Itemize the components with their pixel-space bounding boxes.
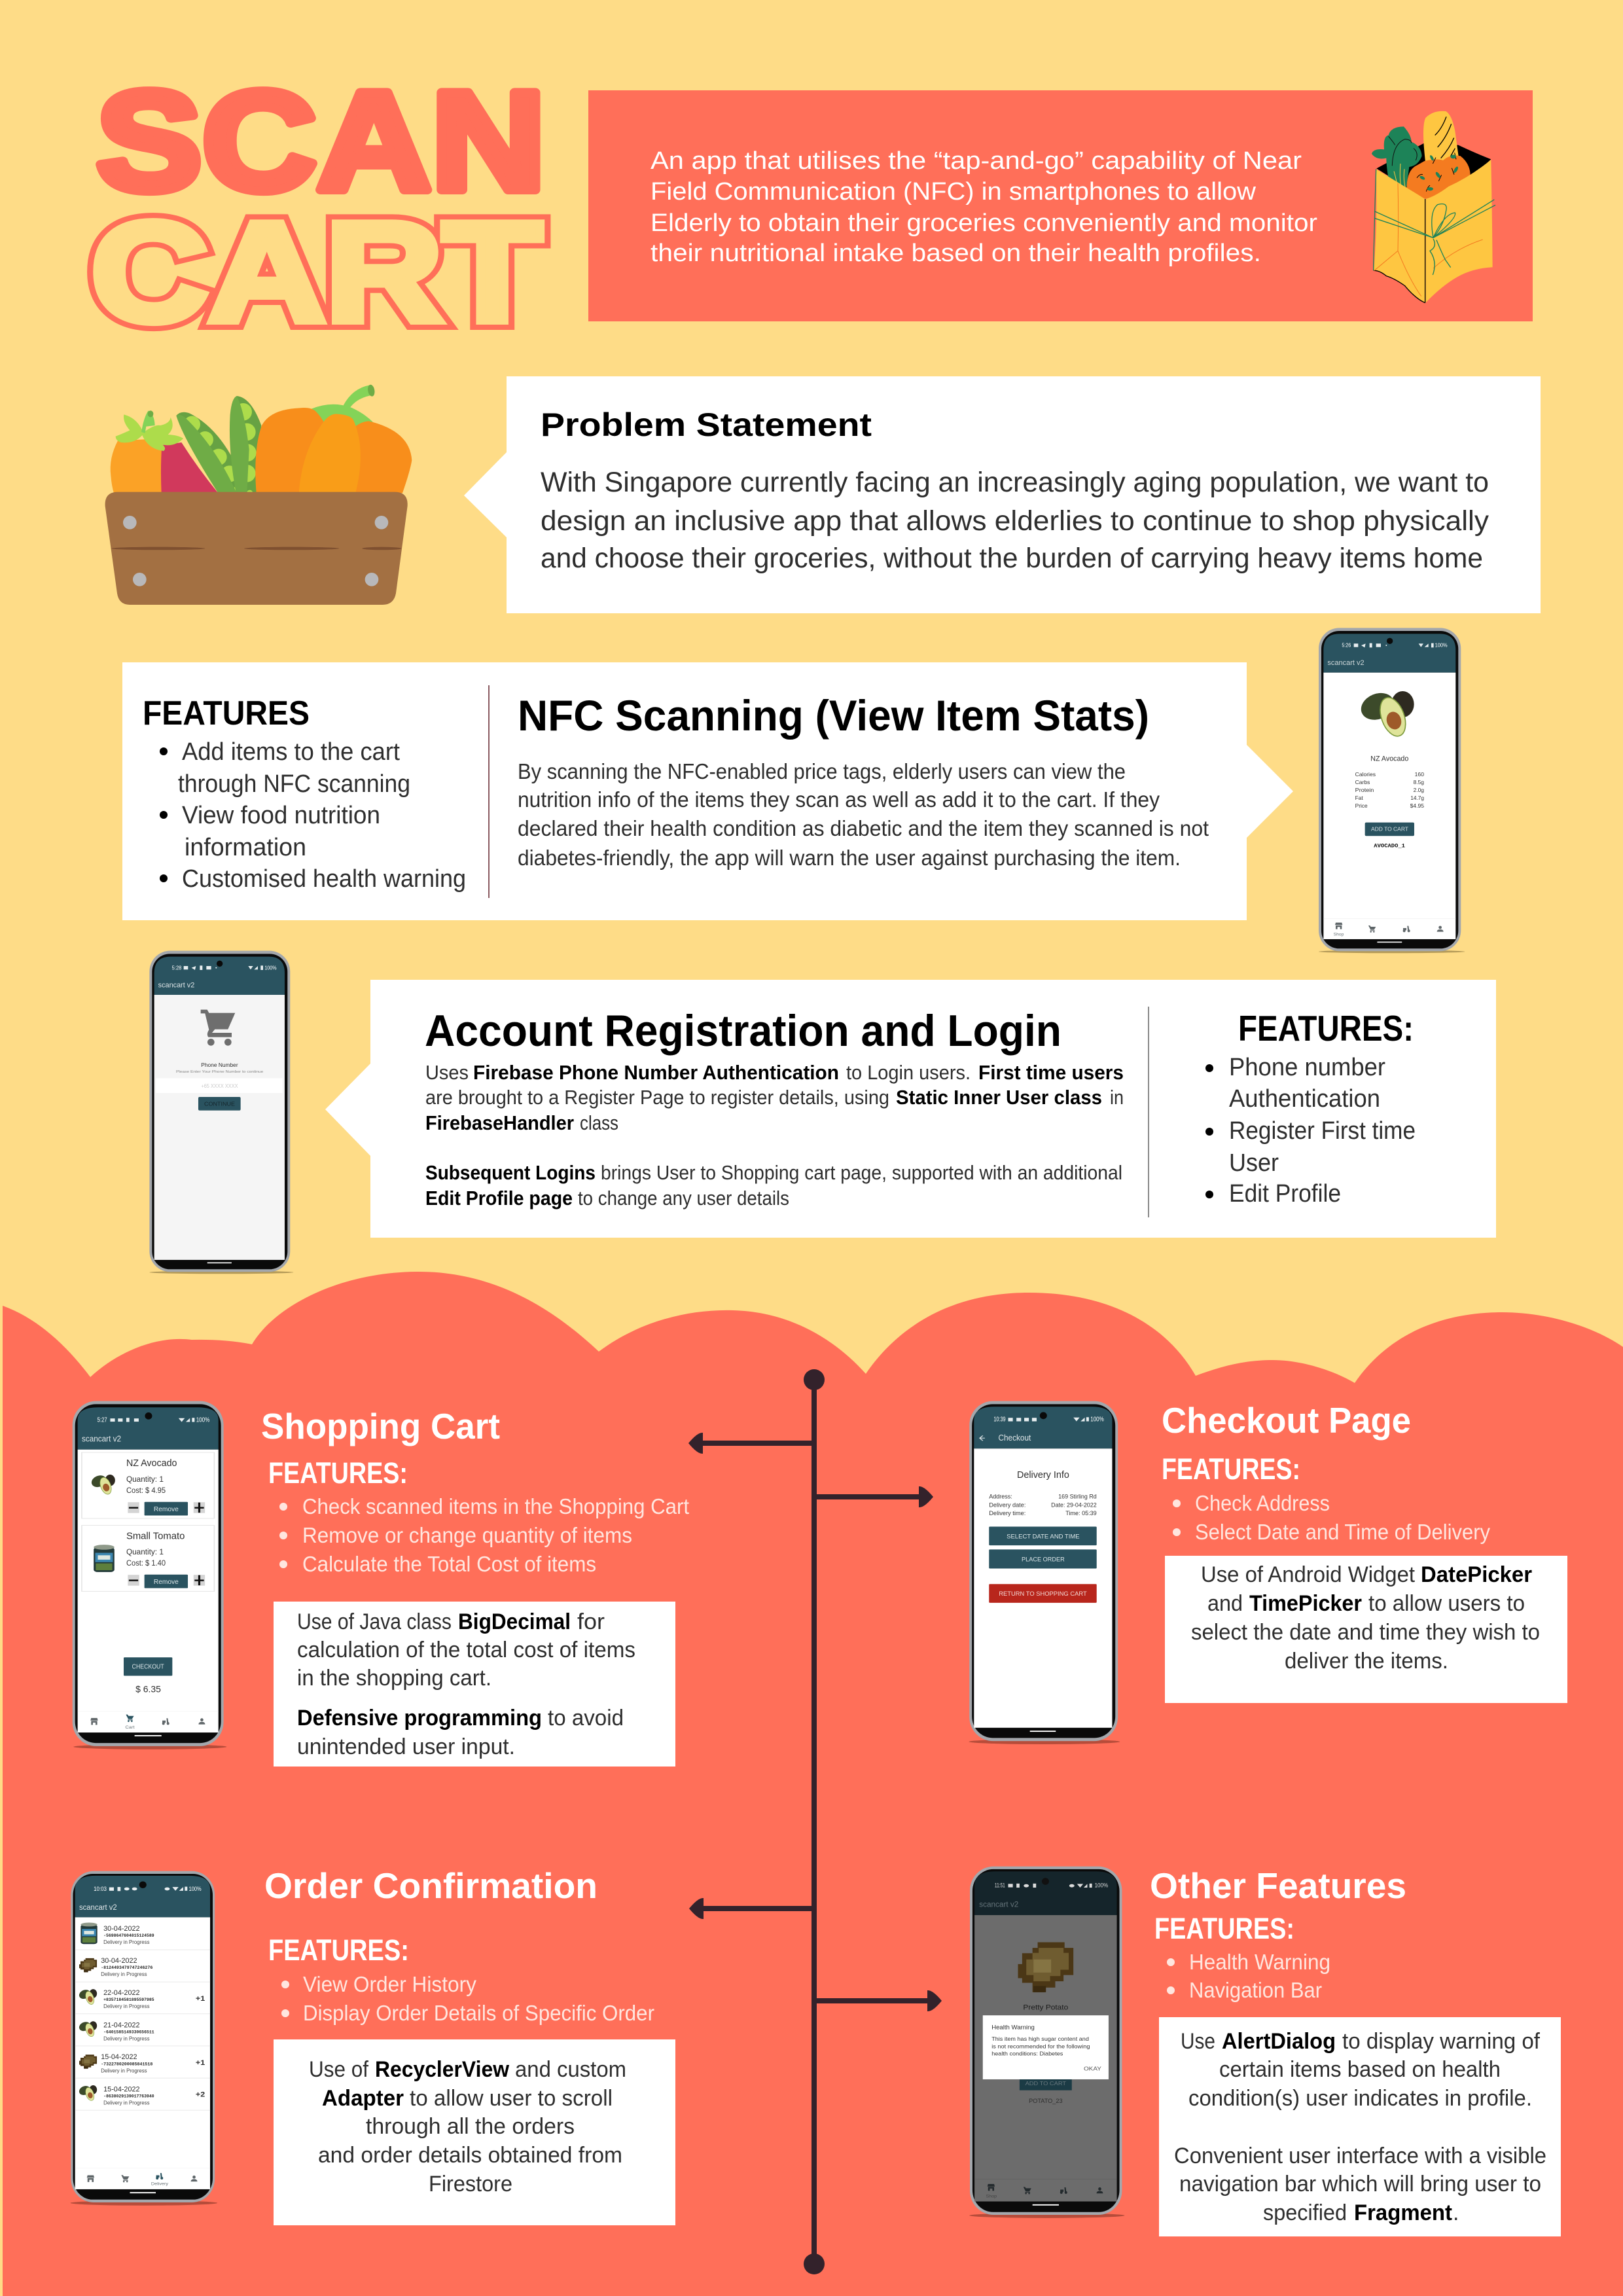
callout: BigDecimal xyxy=(274,1602,675,1767)
order row 4: -6401585149330656511 xyxy=(103,2030,154,2035)
title: Scan Cart xyxy=(91,62,546,351)
text: problem statement body: and choose their groceries, without the burden of carrying heavy items home xyxy=(541,543,1483,574)
callout: AlertDialog and navigation: specified xyxy=(1263,2200,1347,2225)
heading: other features: Other Features xyxy=(1150,1865,1406,1906)
phone mockup: login screen: 100% xyxy=(264,965,277,971)
callout: BigDecimal: unintended user input. xyxy=(297,1734,515,1759)
dialog: health warning xyxy=(983,2015,1109,2079)
phone mockup: item stats screen: Fat xyxy=(1355,795,1363,801)
text: problem statement body xyxy=(541,467,1489,574)
callout: RecyclerView: to allow user to scroll xyxy=(410,2086,613,2111)
cart item: small tomato: Quantity: 1 xyxy=(126,1549,164,1556)
list: account features: Register First time xyxy=(1229,1117,1416,1145)
arrow: to shopping cart xyxy=(688,1433,812,1454)
order row 5: Delivery in Progress xyxy=(101,2068,147,2074)
phone mockup: checkout screen: Checkout xyxy=(998,1433,1031,1443)
text: account description: Edit Profile page xyxy=(425,1187,573,1210)
order row 3: +1 xyxy=(196,1994,205,2003)
callout: AlertDialog and navigation: . xyxy=(1453,2200,1459,2225)
callout: DatePicker and TimePicker: and xyxy=(1207,1591,1243,1616)
heading: account registration: Account Registration and Login xyxy=(425,1006,1061,1056)
order row 3 xyxy=(75,1988,210,2014)
phone mockup: item stats screen: NZ Avocado xyxy=(1370,755,1408,763)
phone mockup: checkout screen: 169 Stirling Rd xyxy=(1058,1493,1097,1500)
phone mockup: item stats screen: Shop xyxy=(1334,932,1344,937)
phone mockup: order history screen: 100% xyxy=(189,1885,202,1892)
phone mockup: shopping cart screen: $ 6.35 xyxy=(135,1684,161,1694)
callout: RecyclerView: and custom xyxy=(515,2057,626,2082)
phone mockup: health warning screen: Shop xyxy=(986,2193,997,2198)
phone mockup: shopping cart screen: CHECKOUT xyxy=(132,1663,164,1670)
title: Scan Cart: CART xyxy=(91,192,542,351)
order row 3: +8357184581895597985 xyxy=(103,1997,154,2002)
text: NFC description xyxy=(518,759,1209,870)
panel: problem statement xyxy=(464,376,1541,613)
dialog: health warning: Health Warning xyxy=(991,2024,1035,2031)
cart item: avocado: Remove xyxy=(154,1505,179,1513)
phone mockup: item stats screen: Price xyxy=(1355,802,1368,809)
phone mockup: login screen: 5:28 xyxy=(172,965,182,971)
order row 6: -8638029139017763940 xyxy=(103,2094,154,2099)
callout: BigDecimal: to avoid xyxy=(548,1706,624,1731)
phone mockup: item stats screen xyxy=(1319,628,1465,953)
callout: RecyclerView: and order details obtained from xyxy=(318,2143,622,2168)
panel: account registration xyxy=(325,980,1496,1238)
text: NFC description: nutrition info of the items they scan as well as add it to the cart. If they xyxy=(518,787,1160,812)
order row 1: 30-04-2022 xyxy=(103,1924,140,1933)
list: order features: Display Order Details of Specific Order xyxy=(303,2001,654,2025)
list: order features: View Order History xyxy=(303,1972,476,1996)
title: Scan Cart: CART xyxy=(91,192,542,351)
title: Scan Cart: SCAN xyxy=(96,62,546,220)
arrow: to order confirmation xyxy=(689,1898,812,1919)
callout: AlertDialog and navigation: AlertDialog xyxy=(1222,2029,1336,2054)
phone mockup: checkout screen: Time: 05:39 xyxy=(1065,1510,1097,1516)
phone mockup: health warning screen: 100% xyxy=(1095,1882,1108,1889)
phone mockup: item stats screen: ADD TO CART xyxy=(1371,827,1408,833)
subheading: order features: FEATURES: xyxy=(268,1933,409,1967)
text: app description: Elderly to obtain their groceries conveniently and monitor xyxy=(651,209,1317,237)
phone mockup: order history screen: scancart v2 xyxy=(79,1903,117,1912)
callout: RecyclerView: Use of xyxy=(309,2057,369,2082)
list: other features: Navigation Bar xyxy=(1189,1978,1322,2002)
phone mockup: checkout screen: Delivery Info xyxy=(1017,1469,1069,1480)
text: account description: FirebaseHandler xyxy=(425,1111,574,1134)
list: account features: Authentication xyxy=(1229,1085,1380,1113)
phone mockup: item stats screen: 100% xyxy=(1435,643,1448,649)
list: account features: Edit Profile xyxy=(1229,1180,1341,1208)
order row 6: Delivery in Progress xyxy=(103,2100,150,2106)
callout: DatePicker and TimePicker: deliver the items. xyxy=(1285,1649,1448,1674)
order row 6: +2 xyxy=(196,2090,205,2099)
order row 2: 30-04-2022 xyxy=(101,1957,137,1965)
text: problem statement body: With Singapore currently facing an increasingly aging population, we want to xyxy=(541,467,1489,498)
list: NFC features: View food nutrition xyxy=(182,802,380,829)
order row 5: -7322780200085841518 xyxy=(101,2062,152,2067)
phone mockup: health warning screen: Pretty Potato xyxy=(1023,2003,1068,2012)
text: account description: to change any user details xyxy=(578,1187,789,1210)
text: account description: Firebase Phone Number Authentication xyxy=(473,1061,839,1084)
order row 4 xyxy=(75,2020,210,2046)
phone mockup: checkout screen: RETURN TO SHOPPING CART xyxy=(999,1590,1087,1597)
callout: BigDecimal: BigDecimal xyxy=(458,1609,571,1634)
list: NFC features: through NFC scanning xyxy=(178,770,410,798)
phone mockup: health warning screen: scancart v2 xyxy=(979,1900,1018,1909)
phone mockup: item stats screen: 2.0g xyxy=(1414,787,1424,793)
callout: RecyclerView: Firestore xyxy=(429,2172,512,2197)
section: other features xyxy=(1150,1865,1561,2236)
callout: AlertDialog and navigation: certain items based on health xyxy=(1219,2057,1501,2082)
order row 6: 15-04-2022 xyxy=(103,2085,140,2094)
cart item: avocado: Cost: $ 4.95 xyxy=(126,1487,166,1495)
list: checkout features: Select Date and Time of Delivery xyxy=(1195,1520,1490,1544)
callout: DatePicker and TimePicker: to allow users to xyxy=(1368,1591,1525,1616)
list: shopping cart features: Remove or change quantity of items xyxy=(302,1523,632,1547)
list: NFC features: Customised health warning xyxy=(182,865,466,893)
heading: features: FEATURES xyxy=(143,694,310,732)
phone mockup: checkout screen: 100% xyxy=(1090,1416,1104,1423)
text: account description: to Login users. xyxy=(846,1061,971,1084)
phone mockup: shopping cart screen xyxy=(73,1401,226,1749)
list: NFC features xyxy=(160,738,466,893)
text: app description: An app that utilises the “tap-and-go” capability of Near xyxy=(651,147,1302,175)
list: NFC features: Add items to the cart xyxy=(182,738,400,766)
subheading: checkout features: FEATURES: xyxy=(1162,1452,1300,1486)
callout: DatePicker and TimePicker xyxy=(1165,1556,1567,1703)
panel: app description xyxy=(588,90,1533,321)
text: account description: First time users xyxy=(978,1061,1124,1084)
phone mockup: item stats screen: 5:26 xyxy=(1342,643,1351,649)
callout: AlertDialog and navigation: Convenient user interface with a visible xyxy=(1174,2144,1546,2168)
text: app description xyxy=(651,147,1317,267)
list: account features: User xyxy=(1229,1149,1279,1177)
phone mockup: health warning screen: 11:51 xyxy=(995,1882,1005,1889)
callout: AlertDialog and navigation xyxy=(1159,2017,1561,2236)
order row 3: Delivery in Progress xyxy=(103,2004,150,2009)
heading: account features: FEATURES: xyxy=(1238,1008,1414,1049)
list: other features xyxy=(1167,1950,1330,2002)
order row 1: Delivery in Progress xyxy=(103,1939,150,1945)
heading: shopping cart: Shopping Cart xyxy=(261,1406,500,1446)
phone mockup: shopping cart screen: 5:27 xyxy=(98,1416,107,1424)
section: order confirmation xyxy=(264,1865,675,2225)
phone mockup: item stats screen: Carbs xyxy=(1355,779,1370,785)
callout: AlertDialog and navigation: to display warning of xyxy=(1342,2029,1541,2054)
phone mockup: checkout screen: 10:39 xyxy=(993,1416,1006,1423)
phone mockup: health warning screen xyxy=(969,1867,1124,2218)
phone mockup: item stats screen: $4.95 xyxy=(1410,802,1424,809)
heading: checkout page: Checkout Page xyxy=(1162,1400,1411,1441)
order row 1 xyxy=(75,1922,210,1950)
dialog: health warning: This item has high sugar content and xyxy=(991,2036,1089,2042)
phone mockup: item stats screen: 14.7g xyxy=(1410,795,1424,801)
list: shopping cart features: Calculate the Total Cost of items xyxy=(302,1552,596,1576)
phone mockup: login screen: Phone Number xyxy=(201,1062,238,1068)
phone mockup: item stats screen: AVOCADO_1 xyxy=(1374,844,1405,850)
order row 1: -5698647604815124589 xyxy=(103,1933,154,1938)
phone mockup: item stats screen: 8.5g xyxy=(1414,779,1424,785)
callout: BigDecimal: for xyxy=(577,1609,605,1634)
callout: DatePicker and TimePicker: TimePicker xyxy=(1249,1591,1362,1616)
phone mockup: shopping cart screen: Cart xyxy=(125,1725,135,1729)
phone mockup: health warning screen: POTATO_23 xyxy=(1029,2097,1063,2104)
list: NFC features: information xyxy=(185,834,306,861)
callout: AlertDialog and navigation: condition(s) user indicates in profile. xyxy=(1188,2086,1532,2111)
phone mockup: login screen: Please Enter Your Phone Number to continue xyxy=(176,1070,263,1074)
dialog: health warning: health conditions: Diabetes xyxy=(991,2051,1063,2057)
subheading: shopping cart features: FEATURES: xyxy=(268,1456,408,1490)
callout: DatePicker and TimePicker: select the date and time they wish to xyxy=(1191,1620,1540,1645)
section: shopping cart xyxy=(261,1406,689,1767)
callout: RecyclerView: Adapter xyxy=(322,2086,404,2111)
callout: BigDecimal: Use of Java class xyxy=(297,1609,452,1634)
text: app description: their nutritional intake based on their health profiles. xyxy=(651,240,1261,267)
text: app description: Field Communication (NFC) in smartphones to allow xyxy=(651,178,1257,206)
list: other features: Health Warning xyxy=(1189,1950,1330,1974)
phone mockup: shopping cart screen: scancart v2 xyxy=(82,1435,121,1444)
phone mockup: shopping cart screen: 100% xyxy=(196,1416,209,1424)
text: account description: brings User to Shopping cart page, supported with an additional xyxy=(601,1161,1122,1184)
text: NFC description: declared their health condition as diabetic and the item they scanned is not xyxy=(518,816,1209,840)
panel: coral scalloped section xyxy=(3,1272,1623,2296)
callout: BigDecimal: Defensive programming xyxy=(297,1706,542,1731)
phone mockup: checkout screen: SELECT DATE AND TIME xyxy=(1007,1533,1080,1540)
phone mockup: checkout screen: Delivery date: xyxy=(989,1501,1026,1509)
phone mockup: order history screen xyxy=(71,1871,217,2206)
phone mockup: item stats screen: Calories xyxy=(1355,771,1376,778)
cart item: small tomato: Cost: $ 1.40 xyxy=(126,1560,166,1568)
text: account description xyxy=(425,1061,1124,1210)
list: shopping cart features xyxy=(279,1494,689,1576)
heading: problem statement: Problem Statement xyxy=(541,406,872,443)
text: problem statement body: design an inclusive app that allows elderlies to continue to shop physically xyxy=(541,505,1489,537)
list: checkout features xyxy=(1173,1491,1490,1544)
cart item: small tomato xyxy=(82,1526,214,1591)
order row 5: +1 xyxy=(196,2059,205,2067)
text: account description: class xyxy=(580,1111,618,1134)
heading: order confirmation: Order Confirmation xyxy=(264,1865,597,1906)
phone mockup: login screen: CONTINUE xyxy=(204,1101,235,1107)
order row 2: Delivery in Progress xyxy=(101,1971,147,1977)
phone mockup: order history screen: 10:03 xyxy=(94,1885,107,1892)
text: account description: in xyxy=(1110,1086,1124,1109)
cart item: avocado: NZ Avocado xyxy=(126,1458,177,1469)
callout: DatePicker and TimePicker: Use of Android Widget xyxy=(1201,1562,1416,1587)
order row 2: -8124493479747246276 xyxy=(101,1965,152,1970)
order row 6 xyxy=(75,2085,210,2111)
arrow: to checkout page xyxy=(817,1486,933,1507)
callout: AlertDialog and navigation: navigation bar which will bring user to xyxy=(1179,2172,1541,2197)
phone mockup: login screen: +65 XXXX XXXX xyxy=(201,1083,238,1089)
list: order features xyxy=(281,1972,654,2025)
subheading: other features list title: FEATURES: xyxy=(1154,1912,1294,1945)
phone mockup: checkout screen xyxy=(969,1401,1120,1744)
order row 4: Delivery in Progress xyxy=(103,2036,150,2042)
phone mockup: item stats screen: Protein xyxy=(1355,787,1374,793)
phone mockup: checkout screen: PLACE ORDER xyxy=(1022,1556,1065,1563)
callout: BigDecimal: calculation of the total cost of items xyxy=(297,1638,635,1662)
callout: AlertDialog and navigation: Fragment xyxy=(1354,2200,1452,2225)
arrow: to other features xyxy=(817,1990,942,2011)
callout: RecyclerView: RecyclerView xyxy=(375,2057,510,2082)
phone mockup: checkout screen: Date: 29-04-2022 xyxy=(1051,1501,1097,1509)
section: checkout page xyxy=(1162,1400,1567,1703)
phone mockup: order history screen: Delivery xyxy=(151,2181,168,2186)
text: account description: Subsequent Logins xyxy=(425,1161,596,1184)
order row 2 xyxy=(75,1957,210,1982)
callout: DatePicker and TimePicker: DatePicker xyxy=(1421,1562,1532,1587)
text: account description: Uses xyxy=(425,1061,469,1084)
list: checkout features: Check Address xyxy=(1195,1491,1330,1515)
phone mockup: checkout screen: Address: xyxy=(989,1493,1012,1500)
phone mockup: item stats screen: scancart v2 xyxy=(1327,659,1364,667)
cart item: small tomato: Small Tomato xyxy=(126,1531,185,1541)
phone mockup: login screen: scancart v2 xyxy=(158,982,194,990)
order row 5 xyxy=(75,2053,210,2079)
order row 4: 21-04-2022 xyxy=(103,2021,140,2029)
text: NFC description: By scanning the NFC-enabled price tags, elderly users can view the xyxy=(518,759,1126,783)
dialog: health warning: is not recommended for the following xyxy=(991,2043,1090,2049)
cart item: small tomato: Remove xyxy=(154,1578,179,1585)
callout: BigDecimal: in the shopping cart. xyxy=(297,1666,491,1691)
order row 5: 15-04-2022 xyxy=(101,2053,137,2061)
icon: vegetable crate xyxy=(105,384,412,605)
text: account description: Static Inner User class xyxy=(896,1086,1102,1109)
icon: shopping cart xyxy=(201,1010,235,1046)
list: shopping cart features: Check scanned items in the Shopping Cart xyxy=(302,1494,689,1518)
phone mockup: item stats screen: 160 xyxy=(1415,771,1424,778)
cart item: avocado xyxy=(82,1452,214,1518)
callout: RecyclerView: through all the orders xyxy=(366,2114,575,2139)
heading: NFC scanning: NFC Scanning (View Item Stats) xyxy=(518,691,1149,740)
icon: grocery bag xyxy=(1372,111,1495,303)
timeline with arrows xyxy=(688,1369,942,2274)
callout: RecyclerView xyxy=(274,2039,675,2225)
text: NFC description: diabetes-friendly, the app will warn the user against purchasing the item. xyxy=(518,846,1181,870)
phone mockup: health warning screen: ADD TO CART xyxy=(1026,2081,1066,2087)
cart item: avocado: Quantity: 1 xyxy=(126,1476,164,1484)
callout: AlertDialog and navigation: Use xyxy=(1181,2029,1215,2054)
phone mockup: checkout screen: Delivery time: xyxy=(989,1510,1026,1516)
list: account features: Phone number xyxy=(1229,1054,1385,1081)
order row 3: 22-04-2022 xyxy=(103,1989,140,1997)
dialog: health warning: OKAY xyxy=(1084,2066,1101,2072)
text: account description: are brought to a Register Page to register details, using xyxy=(425,1086,889,1109)
panel: NFC scanning xyxy=(122,662,1293,920)
phone mockup: login screen xyxy=(149,951,293,1274)
list: account features xyxy=(1205,1054,1416,1208)
